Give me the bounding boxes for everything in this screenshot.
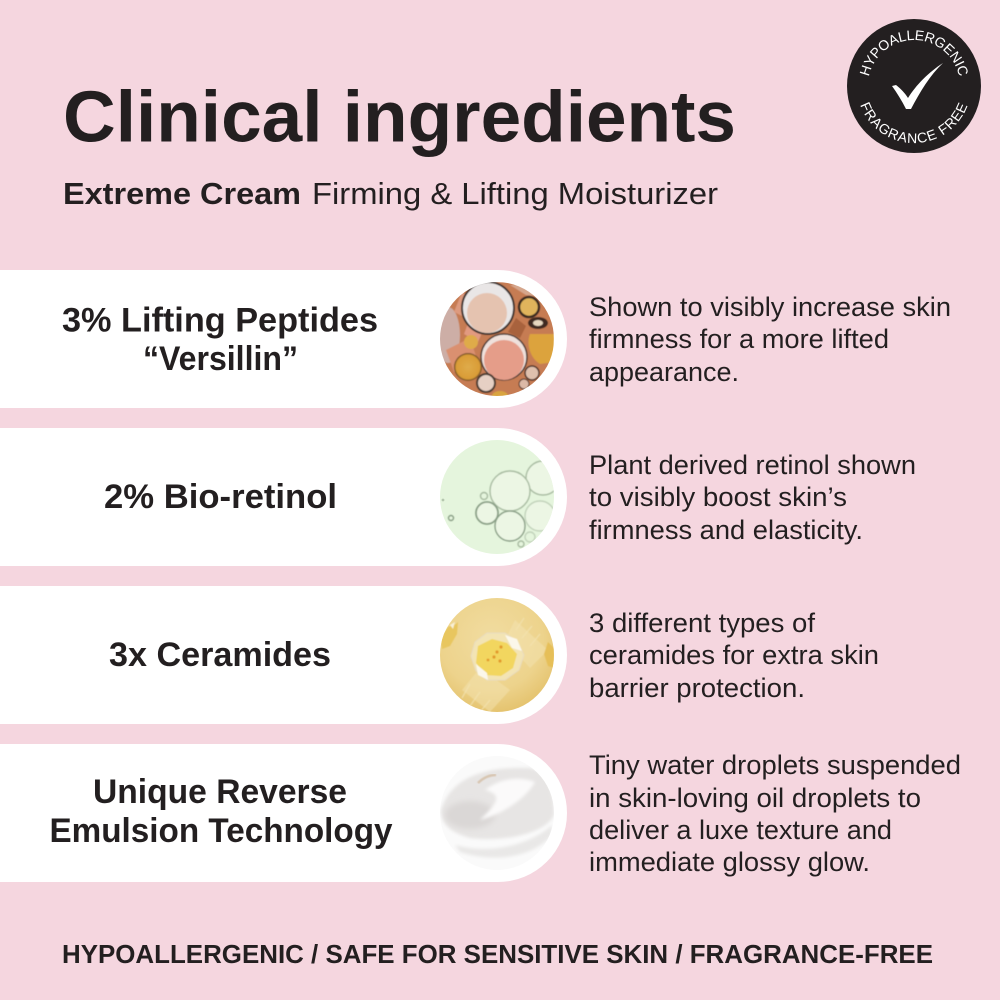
heading: reverse emulsion: Unique Reverse — [93, 773, 347, 811]
text block: reverse emulsion: in skin-loving oil droplets to — [589, 783, 921, 813]
footer text: HYPOALLERGENIC / SAFE FOR SENSITIVE SKIN / FRAGRANCE-FREE — [62, 941, 933, 969]
panel: ceramides — [0, 586, 567, 724]
icon: golden capsule — [440, 598, 554, 712]
badge: hypoallergenic fragrance free: FRAGRANCE FREE — [860, 102, 968, 144]
text block: bio-retinol: to visibly boost skin’s — [589, 482, 847, 512]
icon: cream swirl — [440, 766, 554, 859]
heading: reverse emulsion: Emulsion Technology — [50, 812, 393, 850]
text block: ceramides — [589, 608, 879, 703]
text block: reverse emulsion: immediate glossy glow. — [589, 847, 870, 877]
heading: lifting peptides: 3% Lifting Peptides — [62, 302, 378, 340]
panel: lifting peptides — [0, 270, 567, 408]
heading: lifting peptides: “Versillin” — [143, 340, 298, 378]
heading: lifting peptides — [62, 302, 378, 378]
text block: lifting peptides: appearance. — [589, 357, 739, 387]
subtitle: Firming & Lifting Moisturizer — [312, 177, 718, 211]
title: Clinical ingredients — [63, 76, 736, 158]
heading: bio-retinol: 2% Bio-retinol — [104, 478, 337, 516]
text block: reverse emulsion — [589, 750, 961, 877]
text block: bio-retinol — [589, 450, 916, 545]
heading: ceramides: 3x Ceramides — [109, 636, 331, 674]
badge: hypoallergenic fragrance free — [847, 19, 981, 153]
text block: ceramides: 3 different types of — [589, 608, 815, 638]
icon: check mark — [892, 63, 943, 109]
text block: bio-retinol: Plant derived retinol shown — [589, 450, 916, 480]
text block: reverse emulsion: deliver a luxe texture and — [589, 815, 892, 845]
subtitle: Extreme Cream — [63, 177, 301, 211]
text block: ceramides: barrier protection. — [589, 673, 805, 703]
heading: reverse emulsion — [50, 773, 393, 850]
text block: lifting peptides: Shown to visibly increase skin — [589, 292, 951, 322]
panel: bio-retinol — [0, 428, 567, 566]
text block: ceramides: ceramides for extra skin — [589, 640, 879, 670]
badge: hypoallergenic fragrance free: HYPOALLERGENIC — [860, 30, 968, 76]
panel: reverse emulsion — [0, 744, 567, 882]
icon: green bubbles — [440, 440, 560, 554]
text block: lifting peptides: firmness for a more lifted — [589, 324, 889, 354]
text block: lifting peptides — [589, 292, 951, 387]
subtitle — [63, 177, 718, 211]
icon: oil bubbles — [436, 282, 554, 401]
text block: bio-retinol: firmness and elasticity. — [589, 515, 863, 545]
text block: reverse emulsion: Tiny water droplets suspended — [589, 750, 961, 780]
